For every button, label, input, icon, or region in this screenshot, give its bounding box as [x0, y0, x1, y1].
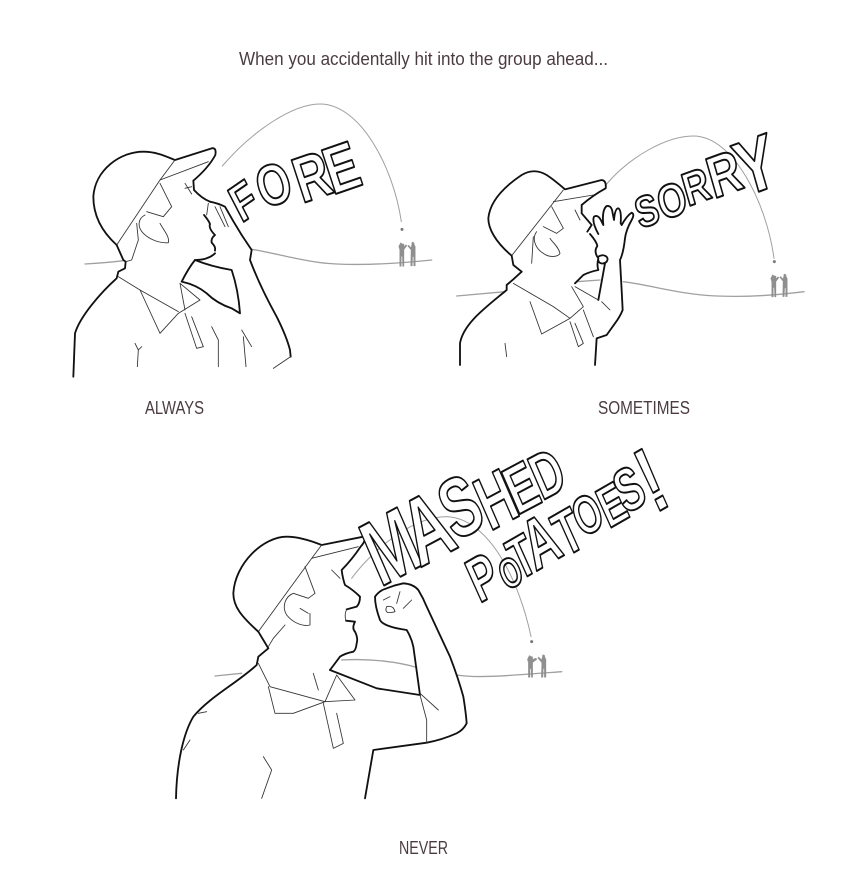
cap and head	[488, 171, 606, 256]
neck and shoulder	[460, 272, 522, 365]
word: FORE: O	[248, 149, 300, 221]
distant golfers	[771, 274, 787, 297]
ear and hairline	[532, 207, 580, 263]
word: FORE: R	[284, 137, 340, 217]
word: MASHED: A	[386, 469, 468, 586]
word: MASHED: S	[425, 455, 496, 559]
word: MASHED: M	[347, 487, 434, 606]
title: When you accidentally hit into the group ahead...	[239, 49, 608, 69]
golf course hill	[85, 249, 432, 264]
word: MASHED: D	[520, 435, 575, 514]
face profile	[204, 215, 215, 251]
open mouth	[345, 609, 347, 621]
word: FORE: E	[314, 126, 369, 209]
collar and placket	[118, 277, 203, 348]
label: sometimes: SOMETIMES	[598, 398, 690, 418]
label: never: NEVER	[399, 838, 448, 858]
cupped hand and forearm	[210, 202, 291, 357]
word: POTATOES!: O	[563, 480, 612, 549]
golf ball	[530, 640, 533, 643]
raised fist and arm	[330, 583, 467, 798]
ear and hairline	[268, 567, 340, 647]
golf course hill	[215, 660, 562, 677]
word: POTATOES!: E	[588, 470, 636, 541]
golf course hill	[457, 280, 804, 296]
neck and shoulder	[176, 632, 268, 798]
shirt folds	[183, 712, 272, 798]
word: SORRY: R	[700, 137, 749, 212]
word: POTATOES!: !	[621, 428, 681, 532]
cap and head	[93, 148, 216, 245]
word: SORRY: R	[676, 157, 716, 216]
word: SORRY: O	[651, 170, 693, 230]
word: MASHED: H	[463, 452, 529, 546]
golf ball	[400, 228, 403, 231]
word: POTATOES!: T	[498, 521, 546, 593]
ball flight arc	[607, 136, 774, 258]
face profile	[575, 234, 598, 283]
word: MASHED: E	[493, 447, 550, 529]
cap and head	[233, 537, 365, 670]
word: POTATOES!: O	[492, 546, 530, 600]
ball flight arc	[222, 104, 401, 222]
lettering: mashed potatoes	[347, 411, 681, 631]
golfer figure	[176, 537, 467, 798]
golfer figure	[73, 148, 291, 377]
cap seam and brim	[512, 190, 593, 256]
word: POTATOES!: A	[510, 497, 572, 585]
panel: sometimes, mumbling sorry	[457, 116, 804, 365]
distant golfers	[399, 242, 415, 266]
ball flight arc	[352, 517, 531, 637]
neck and shoulder	[73, 245, 126, 377]
label: always: ALWAYS	[145, 398, 204, 418]
collar and placket	[258, 663, 355, 748]
golfer figure	[460, 171, 633, 365]
shirt folds	[135, 327, 252, 367]
word: POTATOES!: S	[604, 452, 655, 526]
word: FORE: F	[218, 165, 269, 236]
golf ball	[773, 260, 776, 263]
cap seam and brim	[258, 545, 358, 632]
raised hand	[593, 206, 633, 365]
panel: never, shouting mashed potatoes	[176, 517, 562, 798]
chin and inner arm	[182, 253, 240, 313]
word: POTATOES!: T	[543, 495, 593, 570]
word: SORRY: S	[629, 184, 665, 239]
cap seam and brim	[117, 160, 208, 245]
word: POTATOES!: P	[457, 539, 510, 616]
sleeve and fist detail	[383, 592, 438, 743]
word: SORRY: Y	[724, 116, 787, 213]
panel: always, shouting fore	[73, 104, 432, 377]
back of cap to neck	[512, 256, 522, 272]
distant golfers	[527, 655, 546, 677]
ear and hairline	[126, 183, 192, 262]
collar and placket	[505, 283, 610, 357]
